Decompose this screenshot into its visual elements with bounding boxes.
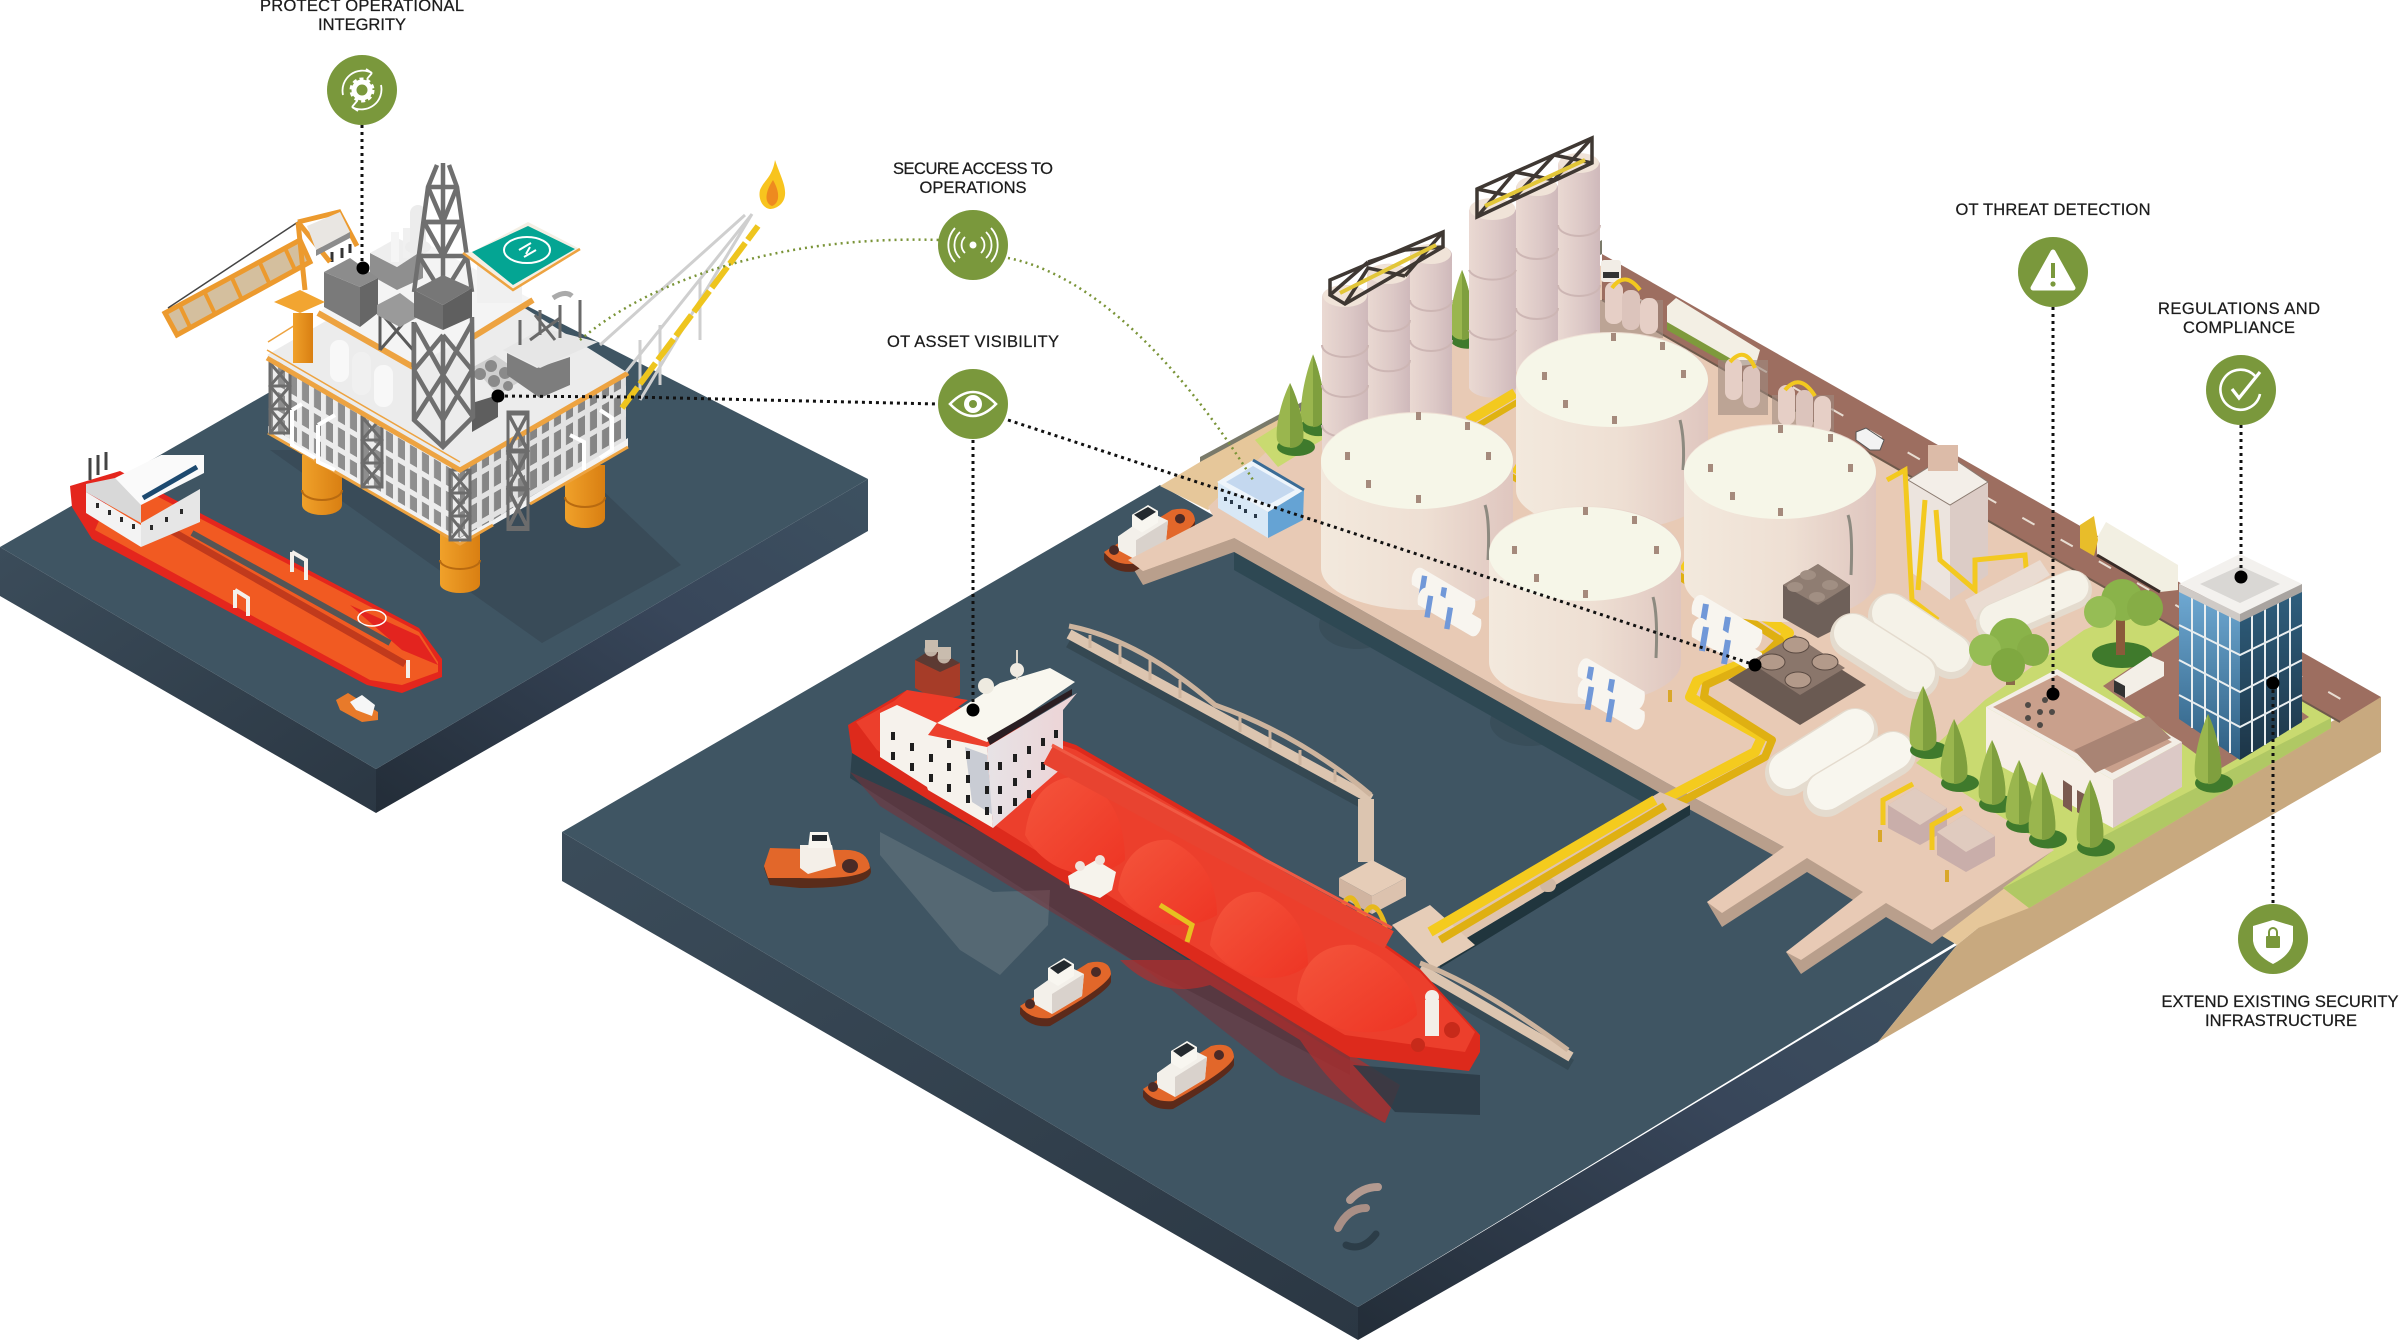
tanker ship	[70, 452, 442, 693]
oil platform	[165, 160, 785, 593]
lawn strip	[2003, 718, 2331, 908]
green patch by silos	[1255, 410, 1322, 467]
icon: threat warning	[2018, 237, 2088, 307]
road	[1602, 254, 2381, 722]
upper deck	[318, 240, 533, 367]
white van in garden	[2114, 656, 2164, 698]
label: security infrastructure: INFRASTRUCTURE	[2205, 1012, 2357, 1030]
label: regulations	[2158, 300, 2320, 337]
derrick block	[414, 275, 472, 330]
lower deck slab	[268, 426, 628, 544]
reflected superstructure	[880, 832, 1050, 975]
label: secure access	[893, 160, 1053, 197]
trunk deck	[1048, 755, 1389, 940]
flare boom	[600, 214, 758, 408]
car	[1856, 428, 1884, 450]
deck	[267, 255, 628, 470]
silo rings front	[1322, 300, 1452, 437]
icon: compliance check	[2206, 355, 2276, 425]
helideck block	[477, 265, 522, 303]
crane	[165, 212, 357, 363]
ship reflection	[850, 753, 1480, 1123]
module transformer	[324, 244, 378, 327]
label: secure access: SECURE ACCESS TO	[893, 160, 1053, 178]
panel: terminal land	[1128, 240, 2381, 1042]
tanker superstructure	[86, 452, 204, 547]
dark water shadow at quay	[1234, 552, 1667, 812]
jetty walkway upper	[1069, 626, 1371, 862]
tug boat 1	[764, 832, 871, 888]
connector: dotted lines	[362, 125, 2273, 904]
dark waterline	[850, 753, 1350, 1075]
label: secure access: OPERATIONS	[920, 179, 1026, 197]
flame	[759, 160, 785, 209]
hull	[848, 690, 1480, 1071]
mid module	[380, 312, 413, 367]
horizontal cream tanks	[1788, 587, 2072, 794]
big storage tank D	[1489, 506, 1681, 704]
AC module	[503, 293, 598, 398]
fan platform	[1728, 635, 1866, 725]
sand top corner	[1160, 408, 1300, 510]
wall white pipes	[292, 404, 612, 470]
front lattice	[508, 413, 528, 528]
label: regulations: COMPLIANCE	[2183, 319, 2295, 337]
tanker deck posts	[235, 552, 408, 678]
small blue building	[1217, 460, 1304, 538]
road edge	[1602, 300, 2340, 722]
cooling stack	[1783, 564, 1850, 638]
road markings	[1640, 300, 2360, 710]
label: asset visibility: OT ASSET VISIBILITY	[887, 333, 1059, 351]
label: protect operational integrity	[260, 0, 464, 34]
module vessels	[330, 340, 393, 407]
pontoon back left	[302, 455, 342, 515]
road vehicles and process units behind tanks	[1598, 260, 1884, 450]
icon: security shield	[2238, 904, 2308, 974]
label: threat detection: OT THREAT DETECTION	[1956, 201, 2150, 219]
tanker truck	[1667, 298, 1760, 370]
filter unit right	[1772, 382, 1834, 435]
bow equipment	[1411, 990, 1460, 1052]
accommodation block	[880, 650, 1077, 828]
lower derrick	[414, 317, 473, 447]
label: security infrastructure: EXTEND EXISTING SECURITY	[2162, 993, 2398, 1011]
offshore small boat	[336, 693, 378, 722]
trees behind silos	[1277, 270, 1484, 456]
silos group front	[1322, 232, 1452, 462]
concrete yard	[1128, 265, 2180, 960]
icon: protect operational integrity	[327, 55, 397, 125]
office tower	[2179, 554, 2302, 760]
upper module	[370, 205, 431, 290]
big storage tank C	[1684, 424, 1876, 622]
jetty walkway lower	[1420, 963, 1571, 1065]
truss rear	[1477, 138, 1592, 217]
paved court	[2103, 630, 2309, 770]
deck	[856, 694, 1475, 1052]
tug boat 3	[1143, 1041, 1234, 1109]
deck rail	[267, 358, 628, 470]
label: regulations: REGULATIONS AND	[2158, 300, 2320, 318]
connector: end dots	[356, 262, 2280, 716]
yellow pipes between tanks	[1468, 393, 1688, 520]
panel: offshore sea platform	[0, 277, 868, 813]
tug pier	[1128, 516, 1234, 571]
reflected hull	[850, 772, 1400, 1123]
windows	[891, 730, 1058, 815]
round trees	[1969, 579, 2163, 685]
pontoon front	[440, 530, 480, 593]
small blue-white tanks A	[1412, 568, 1481, 636]
garden trees	[1910, 686, 2233, 856]
bow shadow	[1353, 1065, 1480, 1115]
main yellow pipe run	[1427, 564, 1789, 942]
equipment cubes	[1883, 784, 1995, 872]
label: protect operational integrity: INTEGRITY	[318, 16, 406, 34]
sand bank	[1878, 697, 2381, 1042]
panel: terminal sea	[562, 485, 1960, 1340]
helideck	[463, 222, 580, 290]
lawn	[1916, 590, 2331, 908]
mid module table	[377, 293, 416, 327]
platform right wall	[460, 374, 626, 538]
pontoon back right	[565, 465, 605, 528]
control building	[1986, 669, 2182, 828]
white van	[1601, 260, 1621, 282]
funnel	[915, 640, 960, 702]
upper deck rails	[318, 300, 533, 367]
big storage tank A	[1321, 412, 1513, 610]
platform left wall	[270, 361, 460, 538]
reflected domes	[1120, 960, 1400, 1123]
fan block	[472, 355, 527, 432]
sand corner	[1932, 885, 2029, 945]
deck crane	[1160, 905, 1192, 942]
tug boat 2	[1020, 958, 1111, 1026]
big storage tank B	[1516, 332, 1708, 530]
deck edge	[268, 433, 628, 544]
back fence	[1200, 240, 1602, 470]
small blue-white tanks C	[1578, 658, 1645, 730]
label: security infrastructure	[2162, 993, 2398, 1030]
domes	[1025, 777, 1417, 1032]
workers	[1668, 690, 1949, 882]
icon: secure access	[938, 210, 1008, 280]
silo rings rear	[1469, 225, 1600, 340]
process tower	[1887, 445, 2050, 620]
upper derrick	[414, 163, 472, 298]
small blue-white tanks B	[1692, 595, 1762, 672]
filter unit mid	[1718, 355, 1768, 415]
connector: secure access arc	[580, 240, 1253, 480]
tug boat 4	[1104, 505, 1195, 572]
pipe bridge	[1392, 792, 1690, 969]
quay wall	[1128, 516, 2054, 974]
silos group rear	[1469, 138, 1600, 398]
LNG ship	[848, 640, 1480, 1071]
truss front	[1330, 232, 1443, 304]
filter unit rear	[1598, 279, 1663, 338]
mooring box	[1339, 860, 1406, 928]
deck module	[1068, 855, 1116, 898]
deck rail upper	[267, 322, 460, 462]
dolphins	[1338, 1187, 1378, 1247]
truck on road	[2080, 516, 2178, 592]
wall lattice bays	[270, 363, 528, 540]
icon: asset visibility eye	[938, 369, 1008, 439]
